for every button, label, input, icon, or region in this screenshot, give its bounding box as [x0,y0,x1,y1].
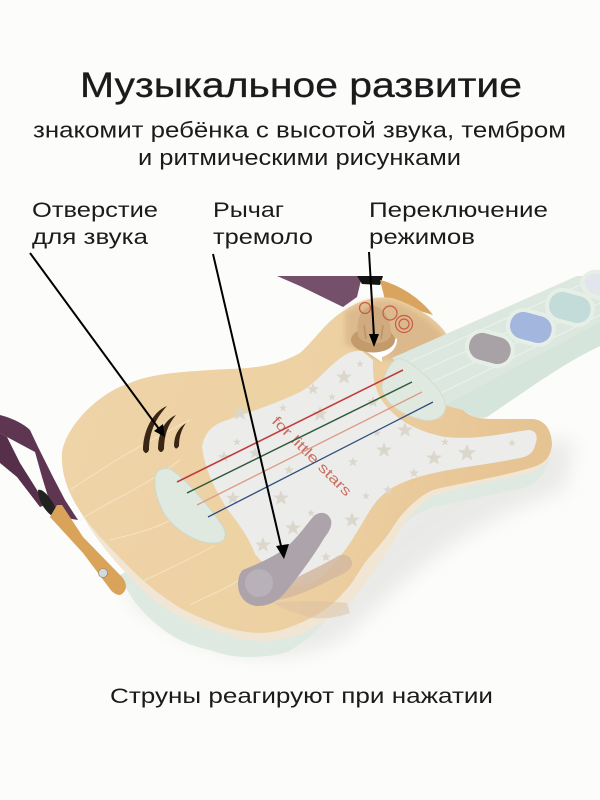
stamp icons [360,302,412,332]
soft shadow [120,440,575,656]
body: mint underside [120,455,550,657]
label: sound hole: для звука [32,225,148,249]
arrow: sound hole [30,253,165,437]
label: sound hole: Отверстие [32,198,158,222]
subtitle [33,118,566,170]
sound holes [143,406,186,453]
caption: Струны реагируют при нажатии [110,684,493,708]
volume knob [351,306,397,362]
neck [392,276,600,418]
label: tremolo lever: Рычаг [213,198,284,222]
label: sound hole [32,198,158,249]
arrow: lever [213,254,289,559]
upper bridge [382,359,445,420]
label: tremolo lever: тремоло [213,225,313,249]
body: wood top [62,298,552,633]
leather tab [50,505,126,595]
label: tremolo lever [213,198,313,249]
pickguard [202,351,537,586]
strap: left loop [0,415,78,520]
pickguard stars [218,360,516,561]
neck buttons [461,265,600,372]
label: mode switch: режимов [369,225,475,249]
wood grain [70,420,245,605]
title: Музыкальное развитие [80,66,522,105]
strap: top band [277,276,433,315]
body: cream edge [62,440,552,641]
tremolo lever [238,513,331,606]
lower bridge [155,468,225,543]
subtitle: знакомит ребёнка с высотой звука, тембром [33,118,566,142]
label: mode switch [369,198,548,249]
subtitle: и ритмическими рисунками [138,145,461,170]
wood: darker upper horn [345,300,443,360]
label: mode switch: Переключение [369,198,548,222]
strings [177,370,433,517]
brand text: for little stars [269,413,355,499]
arrow: switch [369,252,379,347]
lever ghost [268,555,352,618]
guitar illustration [0,252,600,657]
